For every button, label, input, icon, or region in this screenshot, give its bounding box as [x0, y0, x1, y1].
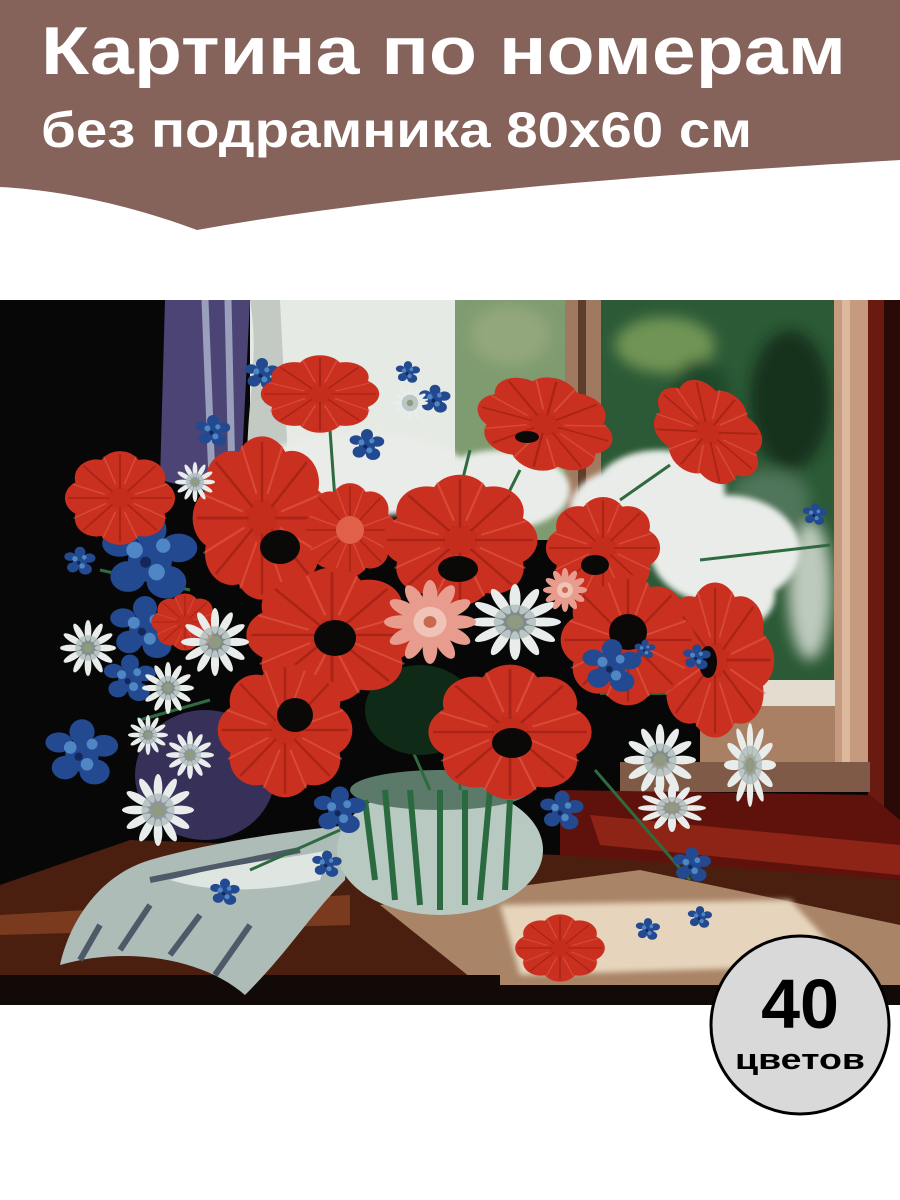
banner — [0, 0, 900, 230]
blue flower clusters — [45, 358, 827, 940]
stems — [100, 430, 830, 880]
title: Картина по номерам — [41, 13, 846, 89]
badge label: цветов — [735, 1044, 865, 1076]
pink flowers — [384, 568, 587, 664]
vase — [337, 770, 543, 915]
subtitle: без подрамника 80х60 см — [41, 102, 752, 158]
dark background — [0, 300, 900, 885]
daisies — [60, 385, 776, 846]
back poppies — [65, 355, 784, 738]
blue flowers over poppies — [582, 639, 711, 692]
poppy centres — [260, 431, 717, 758]
window sill — [560, 790, 900, 880]
badge number: 40 — [761, 965, 839, 1043]
front poppies — [193, 436, 695, 982]
window scene — [450, 300, 900, 830]
curtains — [160, 300, 455, 510]
badge — [711, 936, 889, 1114]
purple shadow cloth — [135, 710, 275, 840]
table — [0, 840, 900, 1005]
white blossoms behind bouquet — [250, 433, 800, 625]
painting — [0, 300, 900, 1005]
bouquet foliage — [365, 665, 460, 755]
white cloth — [60, 825, 350, 995]
